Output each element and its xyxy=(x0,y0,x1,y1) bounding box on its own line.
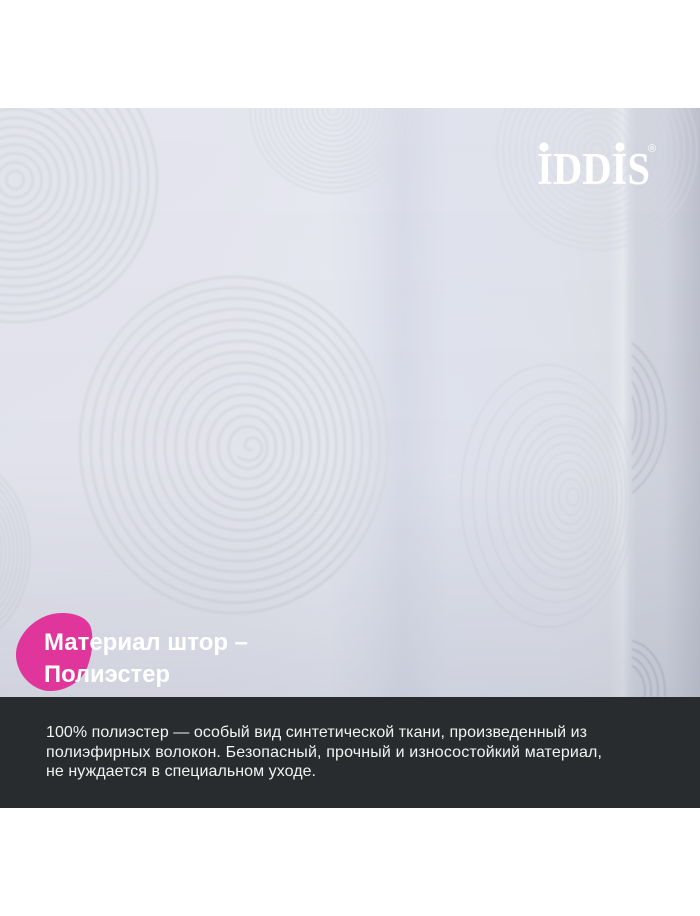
pink accent blob xyxy=(16,613,92,691)
heading: Материал штор – xyxy=(44,629,248,656)
dark description band xyxy=(0,697,700,808)
heading: Полиэстер xyxy=(44,661,170,688)
swirl pattern: top centre circle xyxy=(250,27,416,193)
swirl pattern: bottom right arcs xyxy=(632,640,666,697)
swirl pattern: right strip arcs xyxy=(632,342,667,494)
swirl pattern: large central spiral xyxy=(80,277,388,613)
logo: iddis: IDDIS xyxy=(537,144,650,194)
infographic canvas xyxy=(0,108,700,808)
description text xyxy=(46,724,602,780)
swirl pattern: top right circle xyxy=(694,126,698,174)
swirl pattern: top left circle xyxy=(0,108,158,322)
description text: 100% полиэстер — особый вид синтетической ткани, произведенный из xyxy=(46,724,587,741)
swirl pattern: right circle xyxy=(620,424,624,535)
heading xyxy=(44,629,248,688)
logo: iddis: ® xyxy=(648,143,656,155)
description text: не нуждается в специальном уходе. xyxy=(46,763,316,780)
swirl pattern: left edge circle xyxy=(2,478,24,522)
swirl pattern group xyxy=(0,108,698,697)
description text: полиэфирных волокон. Безопасный, прочный и износостойкий материал, xyxy=(46,744,602,761)
curtain photo background xyxy=(0,108,700,697)
